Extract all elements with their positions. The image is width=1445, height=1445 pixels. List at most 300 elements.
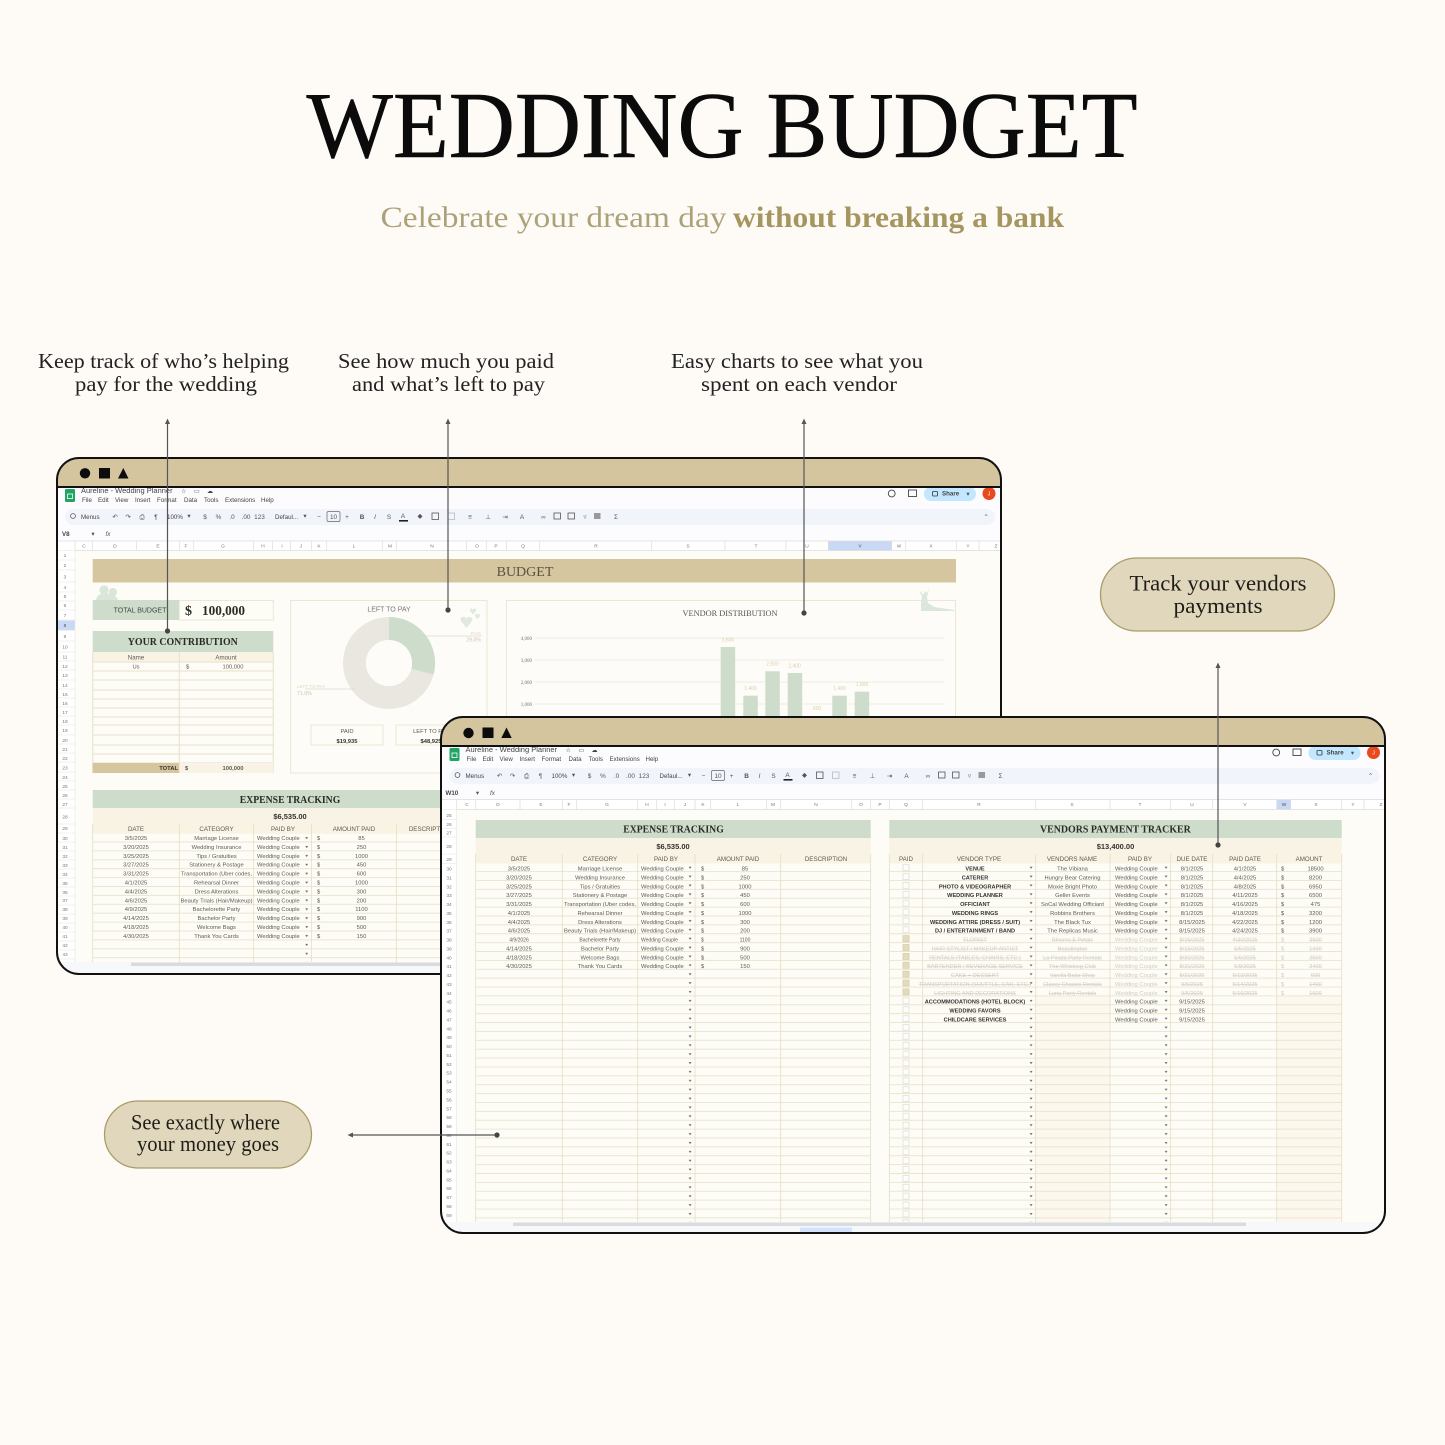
window: budget dashboard [57,458,1002,974]
panel: vendors payment tracker table: 2500 [1309,955,1322,961]
panel: vendors payment tracker table: DJ / ENTERTAINMENT / BAND [935,929,1015,935]
panel: expense tracking: $ [317,872,321,878]
panel: vendors payment tracker table: 1400 [1309,946,1322,952]
panel: expense tracking: 300 [357,889,366,895]
column headers: S [1070,802,1074,808]
row numbers: 26 [62,793,68,799]
toolbar area: ▾ [91,531,95,538]
panel: vendors payment tracker table: $ [1281,964,1285,970]
column headers: D [113,544,117,550]
panel: expense tracking: PAID BY [271,826,295,833]
panel: expense tracking: Welcome Bags [197,925,236,931]
panel: vendors payment tracker table: Wedding Couple [1115,973,1158,979]
panel: vendors payment tracker table: Wedding Couple [1115,1000,1158,1006]
panel: vendors payment tracker table: $ [1281,973,1285,979]
toolbar area: Σ [614,514,618,521]
row numbers: 20 [62,738,68,744]
panel: vendors payment tracker table: TRANSPORTATION (SHUTTLE, CAR, ETC.) [919,982,1031,988]
toolbar area: View [115,497,129,504]
panel: vendors payment tracker table: ACCOMMODATIONS (HOTEL BLOCK) [925,1000,1025,1006]
toolbar area: ¶ [539,773,543,780]
panel: expense tracking table: 4/1/2025 [508,911,530,917]
panel: expense tracking table: 1100 [740,938,751,944]
panel: expense tracking: 1000 [355,854,368,860]
row numbers: 25 [446,813,452,819]
panel: vendors payment tracker table: $ [1281,946,1285,952]
row numbers: 6 [64,603,67,609]
panel: vendor distribution chart: 2,500 [766,662,779,668]
toolbar area: ∞ [541,514,546,521]
toolbar area: 123 [639,773,650,780]
panel: vendors payment tracker table: 5/13/2025 [1233,973,1257,979]
panel: expense tracking: AMOUNT PAID [333,826,376,833]
row numbers: 42 [62,943,68,949]
panel: expense tracking: Wedding Couple [257,836,300,842]
column headers: K [701,802,705,808]
toolbar area: B [744,773,749,780]
checked boxes [903,936,909,995]
panel: vendors payment tracker table: 5/14/2025 [1233,982,1257,988]
panel: vendors payment tracker table: VENUE [965,866,985,872]
toolbar area: 100% [167,514,183,521]
panel: expense tracking table: 3/25/2025 [506,884,532,890]
toolbar area [62,488,996,536]
panel: expense tracking: 3/27/2025 [123,863,149,869]
panel: expense tracking: $ [317,934,321,940]
toolbar area: 10 [714,773,722,780]
toolbar area: Help [646,756,659,763]
toolbar area: Help [261,497,274,504]
panel: vendors payment tracker table: Wedding Couple [1115,911,1158,917]
annotation: contributions: pay for the wedding [75,372,257,396]
panel: vendors payment tracker table: 8/1/2025 [1181,866,1203,872]
toolbar area: − [317,514,321,521]
column headers: E [539,802,543,808]
panel: vendors payment tracker table: $ [1281,893,1285,899]
annotation: paid and left to pay [338,349,554,396]
toolbar area: ▾ [303,513,307,520]
toolbar area: ⊥ [485,514,491,521]
panel: expense tracking: DATE [128,826,144,833]
panel: vendors payment tracker table: 8/1/2025 [1181,875,1203,881]
row numbers: 16 [62,701,68,707]
column headers: N [430,544,434,550]
panel: vendors payment tracker table: 5/16/2025 [1233,991,1257,997]
panel: expense tracking table: Wedding Couple [641,875,684,881]
row numbers: 37 [446,929,452,935]
panel: expense tracking: Wedding Couple [257,934,300,940]
row numbers: 3 [64,574,67,580]
toolbar area: ☁ [207,488,213,495]
toolbar area: ↶ [497,773,502,780]
panel: vendors payment tracker table: Moxie Bright Photo [1048,884,1097,890]
row numbers: 11 [63,654,68,660]
toolbar area: ⇥ [887,773,892,780]
annotation: contributions: Keep track of who’s helping [38,349,289,373]
toolbar area: J [1372,750,1375,756]
panel: expense tracking table: $ [701,920,705,926]
total budget: 100,000 [202,603,245,618]
row numbers: 49 [446,1035,452,1041]
callout: track vendors [1100,558,1334,631]
toolbar area: ☆ [566,747,571,754]
panel: vendors payment tracker table: 5/9/2025 [1234,964,1256,970]
toolbar area: Format [157,497,177,504]
toolbar area: S [771,773,776,780]
panel: your contribution: $ [186,664,190,670]
column headers [58,541,1002,550]
panel: expense tracking: Bachelorette Party [193,907,240,913]
panel: expense tracking table: $ [701,893,705,899]
column headers: J [684,802,687,808]
panel: expense tracking table: Wedding Couple [641,929,684,935]
toolbar area: ⌃ [983,514,989,521]
panel: expense tracking table: Wedding Couple [641,938,678,944]
toolbar area: $ [588,773,592,780]
panel: expense tracking table: Bachelorette Party [579,938,621,944]
panel: expense tracking table: Wedding Couple [641,911,684,917]
panel: expense tracking table: $ [701,938,704,944]
panel: expense tracking: 200 [357,898,366,904]
panel: vendors payment tracker table: Geller Events [1055,893,1090,899]
column headers: G [221,544,225,550]
panel: expense tracking: $ [317,880,321,886]
panel: vendors payment tracker table: FLORIST [963,938,987,944]
panel: expense tracking: Wedding Couple [257,889,300,895]
toolbar area: .0 [614,773,620,780]
panel: vendors payment tracker table: 8/1/2025 [1181,911,1203,917]
callout: where money goes [104,1101,312,1168]
panel: expense tracking table: Transportation (Uber codes, [564,902,636,908]
panel: expense tracking table: Wedding Couple [641,964,684,970]
panel: vendors payment tracker table: SoCal Wedding Officiant [1041,902,1104,908]
panel: left to pay donut: 71.0% [297,691,312,697]
panel: vendor distribution chart: VENDOR DISTRIBUTION [682,609,778,618]
column headers: W [1282,802,1287,808]
panel: expense tracking table: 250 [740,875,750,881]
row numbers: 54 [446,1080,452,1086]
panel: expense tracking: 250 [357,845,366,851]
panel: expense tracking table: 4/30/2025 [506,964,532,970]
panel: vendors payment tracker table: VENDOR TYPE [957,856,1001,863]
row numbers: 24 [62,775,68,781]
scrollbar and sheet tabs [513,1222,1342,1232]
panel: expense tracking table: $ [701,911,705,917]
panel: vendors payment tracker table: VENDORS NAME [1047,856,1097,863]
toolbar area: ≡ [853,773,857,780]
toolbar area: Format [542,756,561,763]
panel: vendors payment tracker table: $ [1281,955,1285,961]
panel: expense tracking table: 150 [740,964,750,970]
panel: vendors payment tracker table: 4/18/2025 [1232,911,1258,917]
panel: expense tracking: 3/25/2025 [123,854,149,860]
panel: vendor distribution chart: 1,000 [521,703,532,708]
panel: expense tracking: 500 [357,925,366,931]
panel: vendors payment tracker table: 9/15/2025 [1179,1018,1205,1024]
panel: expense tracking table: 3/27/2025 [506,893,532,899]
panel: vendors payment tracker table: Wedding Couple [1115,991,1158,997]
row numbers: 14 [62,683,68,689]
panel: expense tracking: 1100 [355,907,368,913]
panel: vendors payment tracker table: Wedding Couple [1115,938,1158,944]
column headers: C [82,544,86,550]
panel: vendors payment tracker table: 3600 [1309,938,1322,944]
window title bar [441,717,1385,746]
panel: vendors payment tracker table: Wedding Couple [1115,875,1158,881]
row numbers: 28 [446,844,452,850]
total budget [93,600,273,620]
panel: vendor distribution chart: 2,000 [521,681,532,686]
panel: expense tracking table: $ [701,902,705,908]
row numbers: 29 [446,857,452,863]
row numbers: 61 [446,1142,452,1148]
toolbar area: ▿ [968,773,971,780]
toolbar area: Edit [98,497,109,504]
row numbers: 64 [446,1168,452,1174]
toolbar area: ⇥ [502,514,508,521]
toolbar area: Extensions [225,497,255,504]
panel: expense tracking table: Dress Alterations [578,920,622,926]
panel: vendors payment tracker table: 18500 [1307,866,1324,872]
panel: expense tracking table: Wedding Couple [641,866,684,872]
panel: expense tracking table: Rehearsal Dinner [577,911,623,917]
row numbers: 41 [62,934,68,940]
panel: expense tracking table: 4/4/2025 [508,920,530,926]
icon: couple silhouette [96,585,118,600]
panel: vendors payment tracker table: 1400 [1309,982,1322,988]
panel: vendors payment tracker table: Beautington [1058,946,1087,952]
panel: vendors payment tracker table: 5/6/2025 [1234,955,1256,961]
column headers: Z [1380,802,1383,808]
panel: vendors payment tracker table: $ [1281,884,1285,890]
panel: expense tracking table: Wedding Couple [641,946,684,952]
toolbar area: ☆ [181,488,187,495]
column headers: Y [966,544,970,550]
row numbers: 44 [446,991,452,997]
panel: expense tracking table: Thank You Cards [578,964,622,970]
budget banner: BUDGET [497,565,554,580]
panel: expense tracking: $ [317,836,321,842]
panel: vendors payment tracker table: 4/24/2025 [1232,929,1258,935]
arrow: vendor tracker [1215,662,1221,848]
toolbar area: Σ [999,773,1003,780]
panel: expense tracking table: Wedding Couple [641,884,684,890]
row numbers: 60 [446,1133,452,1139]
toolbar area: A [785,772,790,779]
panel: vendors payment tracker table: $ [1281,875,1285,881]
column headers: X [1314,802,1318,808]
panel: expense tracking table: 4/9/2026 [509,938,529,944]
panel: your contribution: 100,000 [223,664,243,670]
panel: expense tracking: Stationery & Postage [189,863,244,869]
toolbar area [446,747,1380,795]
toolbar area: ¶ [154,514,158,521]
row numbers: 27 [446,830,452,836]
panel: expense tracking table: 3/31/2025 [506,902,532,908]
panel: expense tracking: Wedding Couple [257,916,300,922]
toolbar area: + [730,773,734,780]
scrollbar and sheet tabs [74,962,440,966]
panel: vendors payment tracker table: 4/4/2025 [1234,875,1256,881]
panel: expense tracking table: 4/6/2025 [508,929,530,935]
column headers: P [494,544,498,550]
row numbers: 39 [62,916,68,922]
toolbar area: J [988,492,991,498]
panel: expense tracking: CATEGORY [199,826,234,833]
icon: bride and groom [920,588,954,611]
column headers: T [1139,802,1142,808]
panel: vendors payment tracker table: 8/31/2025 [1180,955,1204,961]
row numbers [58,550,75,966]
panel: vendor distribution chart: 1,600 [856,682,868,688]
panel: vendors payment tracker table: Hungry Bear Catering [1044,875,1101,881]
toolbar area: ▿ [583,514,587,521]
panel: your contribution: Name [128,654,145,662]
panel: vendors payment tracker table: 1600 [1309,991,1322,997]
panel: expense tracking: Wedding Couple [257,898,300,904]
toolbar area: ↶ [112,514,118,521]
callout: where money goes: your money goes [137,1131,279,1156]
row numbers: 25 [62,784,68,790]
panel: expense tracking: Wedding Couple [257,872,300,878]
row numbers: 52 [446,1062,452,1068]
panel: vendors payment tracker table: RENTALS (TABLES, CHAIRS, ETC.) [929,955,1021,961]
callout: track vendors: payments [1174,593,1262,618]
callout: where money goes: See exactly where [131,1110,280,1134]
row numbers: 40 [446,955,452,961]
toolbar area: I [759,773,761,780]
panel: vendors payment tracker table: 9/5/2025 [1181,991,1203,997]
row numbers: 1 [64,553,67,559]
panel: vendors payment tracker table: Luna Party Rentals [1049,991,1096,997]
panel: vendors payment tracker table: WEDDING PLANNER [947,893,1003,899]
toolbar area: View [500,756,513,763]
row numbers: 21 [62,747,68,753]
toolbar area: $ [203,514,207,521]
panel: vendor distribution chart: 1,400 [744,686,757,692]
toolbar area: ▾ [1351,750,1354,757]
subtitle: without breaking a bank [733,201,1064,234]
panel: expense tracking table: 4/18/2025 [506,955,532,961]
arrow: vendor chart [801,418,807,616]
panel: vendor distribution chart: 2,400 [788,664,801,670]
toolbar area: + [345,514,349,521]
column headers: O [475,544,479,550]
toolbar area: ⌃ [1368,773,1373,780]
panel: vendors payment tracker table: PAID BY [1128,856,1152,863]
toolbar area: ▭ [578,747,584,754]
panel: vendors payment tracker table: Vanilla Bake Shop [1050,973,1095,979]
row numbers: 4 [64,585,67,591]
panel: vendors payment tracker table: 9/15/2025 [1179,1009,1205,1015]
callout: track vendors: Track your vendors [1130,570,1306,596]
panel: vendors payment tracker table: BARTENDER / BEVERAGE SERVICE [927,964,1023,970]
panel: expense tracking: $ [317,889,321,895]
column headers: R [594,544,598,550]
toolbar area: .00 [626,773,635,780]
column headers: Q [521,544,525,550]
row numbers: 68 [446,1204,452,1210]
subtitle: Celebrate your dream day [380,201,726,234]
row numbers: 43 [62,952,68,958]
toolbar area: 123 [254,514,265,521]
column headers: L [737,802,740,808]
panel: expense tracking table: DATE [511,856,527,863]
panel: vendors payment tracker table: Classy Chassis Rentals [1043,982,1102,988]
arrow: left to pay [445,418,451,613]
column headers: Q [904,802,908,808]
toolbar area: ∞ [926,773,931,780]
toolbar area: File [466,756,477,763]
panel: vendors payment tracker table: 3200 [1309,911,1322,917]
row numbers: 7 [64,613,67,619]
panel: vendors payment tracker table: OFFICIANT [960,902,990,908]
panel: vendors payment tracker table: 8/31/2025 [1180,973,1204,979]
panel: expense tracking: 3/31/2025 [123,872,149,878]
column headers: S [686,544,690,550]
column headers: I [664,802,666,808]
panel: vendors payment tracker table: Wedding Couple [1115,982,1158,988]
panel: expense tracking table: Welcome Bags [581,955,620,961]
toolbar area: ☁ [592,747,598,754]
column headers: V [1243,802,1247,808]
toolbar area: File [82,497,93,504]
row numbers: 58 [446,1115,452,1121]
panel: vendors payment tracker table: Wedding Couple [1115,1018,1158,1024]
total budget: TOTAL BUDGET [114,608,167,614]
panel: expense tracking: 4/30/2025 [123,934,149,940]
panel: vendor distribution chart [506,588,956,716]
panel: expense tracking: Wedding Couple [257,863,300,869]
column headers: G [605,802,609,808]
toolbar area: ▾ [476,790,479,797]
panel: expense tracking table: 900 [740,946,750,952]
panel: expense tracking: Thank You Cards [194,934,239,940]
column headers: K [317,544,321,550]
row numbers: 22 [62,756,68,762]
panel: vendors payment tracker table: HAIR STYLIST / MAKEUP ARTIST [932,946,1019,952]
panel: expense tracking: 900 [357,916,366,922]
row numbers: 30 [446,866,452,872]
panel: vendors payment tracker table: PHOTO & VIDEOGRAPHER [939,884,1011,890]
panel: expense tracking table: Marriage License [578,866,622,872]
panel: expense tracking: 4/9/2025 [125,907,147,913]
column headers: P [878,802,882,808]
panel: left to pay donut: LEFT TO PAY [297,684,325,689]
row numbers: 26 [446,822,452,828]
row numbers: 69 [446,1213,452,1219]
panel: expense tracking: Marriage License [194,836,239,842]
toolbar area: fx [490,790,496,797]
row numbers: 13 [62,673,68,679]
toolbar area: Aureline - Wedding Planner [466,745,558,754]
toolbar area: % [600,773,606,780]
row numbers: 28 [62,814,68,820]
icon: hearts [461,609,480,628]
panel: vendors payment tracker table: AMOUNT [1296,856,1323,863]
toolbar area: ⎙ [524,773,530,780]
row numbers: 37 [62,898,68,904]
panel: expense tracking: Wedding Couple [257,907,300,913]
toolbar area: ⊥ [870,773,875,780]
panel: vendors payment tracker table: 4/30/2025 [1233,938,1257,944]
panel: expense tracking: $ [317,916,321,922]
panel: expense tracking table [476,820,871,1222]
toolbar area: fx [106,531,111,538]
row numbers: 67 [446,1195,452,1201]
row numbers: 65 [446,1177,452,1183]
row numbers: 38 [446,938,452,944]
